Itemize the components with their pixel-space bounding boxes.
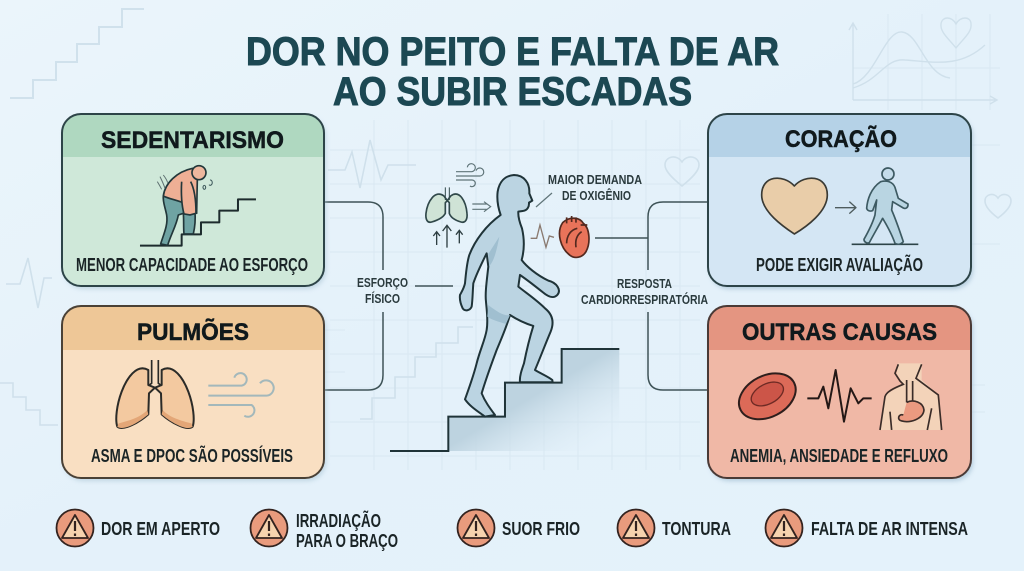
- alert: dor em aperto: [56, 510, 220, 546]
- icon: pulse small: [531, 225, 554, 247]
- background: chart with heart: [849, 18, 997, 104]
- stairs: [390, 349, 619, 451]
- alert: tontura: [618, 510, 731, 546]
- icon: anatomical heart: [560, 216, 589, 257]
- alert: falta de ar intensa: FALTA DE AR INTENSA: [811, 519, 968, 539]
- background: stairs top left: [10, 9, 144, 98]
- background: ECG and hearts: [0, 140, 1011, 425]
- text: menor capacidade: MENOR CAPACIDADE AO ESFORÇO: [76, 255, 308, 275]
- heading: outras causas: OUTRAS CAUSAS: [742, 319, 937, 346]
- label: resposta cardiorrespiratoria: RESPOSTA: [617, 276, 672, 291]
- icon: torso with stomach: [880, 363, 942, 430]
- title: DOR NO PEITO E FALTA DE AR: [246, 30, 779, 74]
- icon: heart to walker: [762, 168, 918, 244]
- icon: tired man climbing stairs: [140, 166, 256, 246]
- title: AO SUBIR ESCADAS: [333, 70, 692, 114]
- text: anemia: ANEMIA, ANSIEDADE E REFLUXO: [730, 446, 948, 466]
- heading: pulmoes: PULMÕES: [137, 318, 249, 346]
- label: maior demanda: DE OXIGÊNIO: [562, 188, 631, 203]
- text: asma e dpoc: ASMA E DPOC SÃO POSSÍVEIS: [91, 445, 293, 466]
- alert: irradiacao para o braco: PARA O BRAÇO: [296, 531, 398, 551]
- panel: sedentarismo: [62, 114, 326, 289]
- panel: outras causas: [708, 306, 973, 481]
- alert: dor em aperto: DOR EM APERTO: [101, 519, 220, 539]
- panel: coracao: [708, 114, 973, 289]
- alert: irradiacao para o braco: [250, 510, 398, 551]
- icon: wind: [208, 373, 274, 417]
- label: maior demanda: MAIOR DEMANDA: [548, 172, 642, 187]
- alert: irradiacao para o braco: IRRADIAÇÃO: [296, 510, 381, 531]
- heading: sedentarismo: SEDENTARISMO: [101, 127, 284, 154]
- label: maior demanda: [548, 172, 642, 203]
- panel: pulmoes: [62, 306, 326, 481]
- label: esforco fisico: FÍSICO: [365, 291, 400, 306]
- label: resposta cardiorrespiratoria: [581, 276, 708, 307]
- label: esforco fisico: [357, 275, 408, 306]
- icon: up arrows: [433, 225, 463, 248]
- title: [246, 30, 779, 114]
- icon: small lungs: [426, 187, 467, 222]
- text: pode exigir: PODE EXIGIR AVALIAÇÃO: [756, 254, 923, 275]
- pointer line: [536, 193, 552, 207]
- label: esforco fisico: ESFORÇO: [357, 275, 408, 290]
- icon: lungs: [116, 360, 194, 428]
- icon: small wind: [456, 164, 484, 187]
- icon: red blood cell: [731, 364, 803, 428]
- alert: tontura: TONTURA: [662, 519, 731, 539]
- connectors: [324, 202, 708, 390]
- icon: pulse: [807, 370, 872, 422]
- label: resposta cardiorrespiratoria: CARDIORRESPIRATÓRIA: [581, 292, 708, 307]
- figure: person climbing: [460, 175, 559, 417]
- heading: coracao: CORAÇÃO: [785, 125, 897, 153]
- alert: suor frio: [458, 510, 580, 546]
- icon: inhale arrow: [472, 202, 491, 212]
- alert: falta de ar intensa: [766, 510, 968, 546]
- alert: suor frio: SUOR FRIO: [502, 519, 580, 539]
